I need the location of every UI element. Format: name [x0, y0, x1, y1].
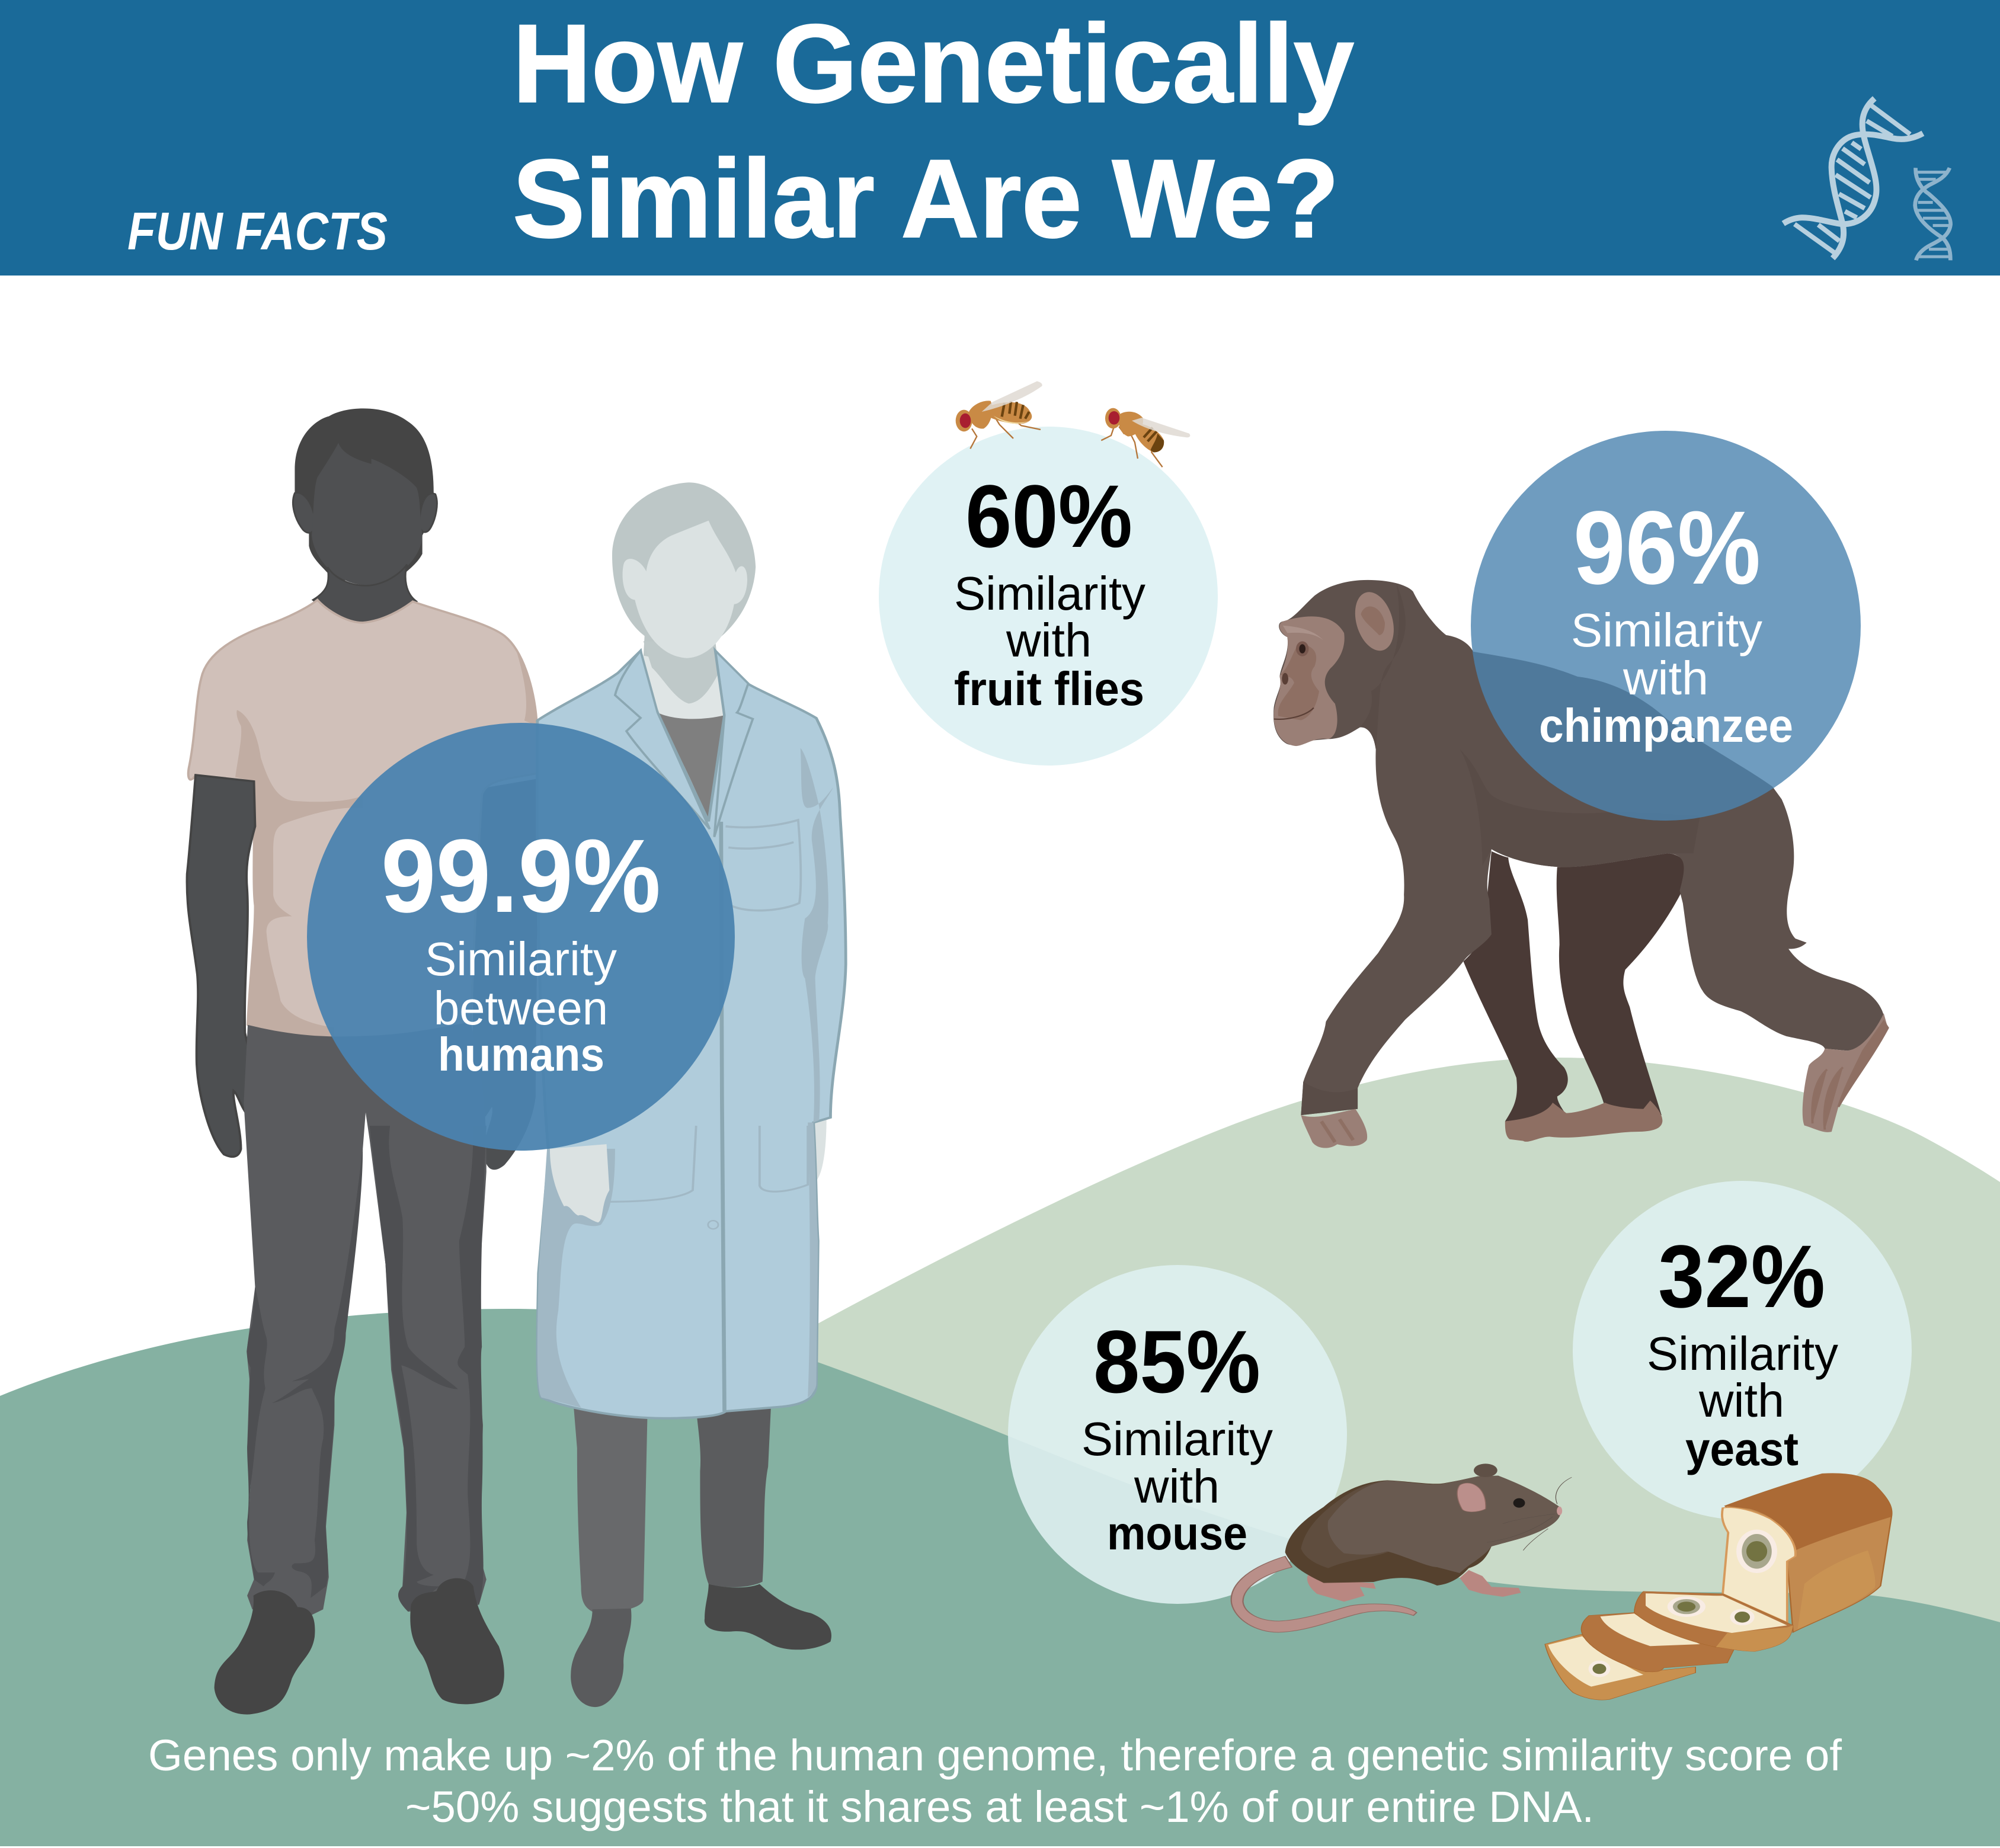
man trousers and shoes	[215, 1022, 504, 1715]
label: fun facts: FUN FACTS	[127, 202, 388, 261]
stat: 96%: 96%	[1573, 490, 1761, 606]
caption: similarity with yeast: Similarity	[1647, 1327, 1838, 1380]
stat: 32%: 32%	[1658, 1226, 1825, 1326]
coat lapels and chest pocket	[615, 651, 801, 911]
loaf top crust	[1725, 1474, 1892, 1551]
mouse nose	[1557, 1507, 1562, 1515]
caption: similarity between humans	[425, 933, 617, 1081]
stat: 99.9%: 99.9%	[381, 818, 661, 934]
chimp hand	[1301, 1109, 1367, 1148]
footer note: ~50% suggests that it shares at least ~1% of our entire DNA.	[405, 1782, 1594, 1831]
icon: fruit fly left	[956, 381, 1042, 449]
mould spot on loaf	[1736, 1530, 1777, 1573]
mouse whiskers	[1487, 1477, 1572, 1551]
icon: small DNA helix	[1915, 168, 1951, 260]
caption: similarity with yeast: with	[1698, 1374, 1784, 1427]
slice one face	[1646, 1593, 1787, 1633]
chimp foot	[1505, 1101, 1662, 1142]
callout circle: yeast 32%	[1573, 1181, 1912, 1520]
mouse fur midtone	[1301, 1481, 1396, 1568]
figure: scientist in lab coat	[537, 482, 846, 1707]
caption: similarity with fruit flies: Similarity	[954, 567, 1145, 620]
caption: similarity between humans: humans	[438, 1028, 604, 1081]
illustration: mouldy bread	[1545, 1474, 1892, 1700]
caption: similarity between humans: between	[434, 982, 608, 1035]
chimp eye	[1296, 641, 1308, 656]
background: light green hill	[818, 1058, 2000, 1659]
loaf side highlight	[1797, 1551, 1876, 1629]
caption: similarity with fruit flies: with	[1006, 614, 1092, 667]
loaf side	[1725, 1474, 1892, 1632]
callout circle: fruit flies 60%	[879, 427, 1218, 766]
title: Similar Are We?	[513, 136, 1339, 261]
title	[513, 1, 1354, 261]
mouse far ear	[1474, 1463, 1497, 1477]
loaf face	[1722, 1507, 1796, 1622]
caption: similarity with chimpanzee	[1539, 604, 1793, 752]
chimp far legs	[1463, 851, 1568, 1122]
header band	[0, 0, 2000, 276]
scientist trousers and shoes	[571, 1407, 831, 1707]
chimp hind foot	[1803, 1013, 1888, 1132]
mouse fur highlight	[1328, 1476, 1561, 1573]
mouse eye	[1513, 1498, 1525, 1508]
caption: similarity with fruit flies: fruit flies	[954, 662, 1144, 715]
mouse feet	[1307, 1570, 1521, 1602]
icon: large DNA helix	[1783, 98, 1923, 258]
chimp mouth	[1273, 708, 1314, 719]
chimp brow	[1283, 626, 1324, 640]
caption: similarity with chimpanzee: Similarity	[1571, 604, 1762, 656]
stat: 85%: 85%	[1093, 1312, 1260, 1411]
chimp far leg two	[1557, 853, 1688, 1115]
caption: similarity with yeast: yeast	[1685, 1423, 1799, 1475]
caption: similarity with chimpanzee: with	[1623, 652, 1708, 704]
caption: similarity with yeast	[1647, 1327, 1838, 1475]
slice two face	[1601, 1613, 1700, 1646]
caption: similarity with mouse	[1081, 1413, 1273, 1559]
slice one	[1634, 1591, 1793, 1651]
slice three face	[1548, 1636, 1643, 1687]
figure: man silhouette	[187, 408, 537, 1715]
mouse body	[1285, 1476, 1561, 1586]
mouse near ear	[1457, 1483, 1486, 1512]
callout circle: chimpanzee 96%	[1471, 431, 1861, 821]
lab coat	[537, 651, 846, 1418]
callout circle: humans 99.9%	[307, 723, 735, 1151]
caption: similarity with mouse: with	[1134, 1460, 1220, 1513]
caption: similarity with mouse: mouse	[1107, 1507, 1247, 1559]
caption: similarity with mouse: Similarity	[1081, 1413, 1273, 1465]
callout circle: mouse 85%	[1008, 1265, 1347, 1604]
caption: similarity with chimpanzee: chimpanzee	[1539, 699, 1793, 752]
caption: similarity between humans: Similarity	[425, 933, 617, 985]
chimp face	[1273, 616, 1345, 746]
man upper body	[187, 408, 537, 1170]
slice two	[1581, 1613, 1734, 1672]
chimp shoulder shading	[1301, 583, 1700, 1115]
footer note	[148, 1731, 1842, 1831]
chimp body	[1273, 580, 1888, 1115]
chimp ear	[1349, 588, 1400, 655]
stat: 60%: 60%	[965, 466, 1132, 566]
scientist head and shirt	[612, 482, 756, 821]
icon: fruit fly right	[1101, 408, 1190, 467]
slice three	[1545, 1634, 1695, 1700]
footer note: Genes only make up ~2% of the human genome, therefore a genetic similarity score of	[148, 1731, 1842, 1780]
illustration: chimpanzee	[1273, 580, 1888, 1148]
chimp nostril	[1282, 673, 1288, 684]
mouse tail	[1231, 1556, 1417, 1632]
chimp muzzle	[1278, 643, 1319, 720]
title: How Genetically	[513, 1, 1354, 126]
caption: similarity with fruit flies	[954, 567, 1145, 715]
background: dark green hill	[0, 1309, 2000, 1846]
slice one crust highlight	[1716, 1625, 1793, 1651]
illustration: mouse	[1231, 1463, 1572, 1632]
